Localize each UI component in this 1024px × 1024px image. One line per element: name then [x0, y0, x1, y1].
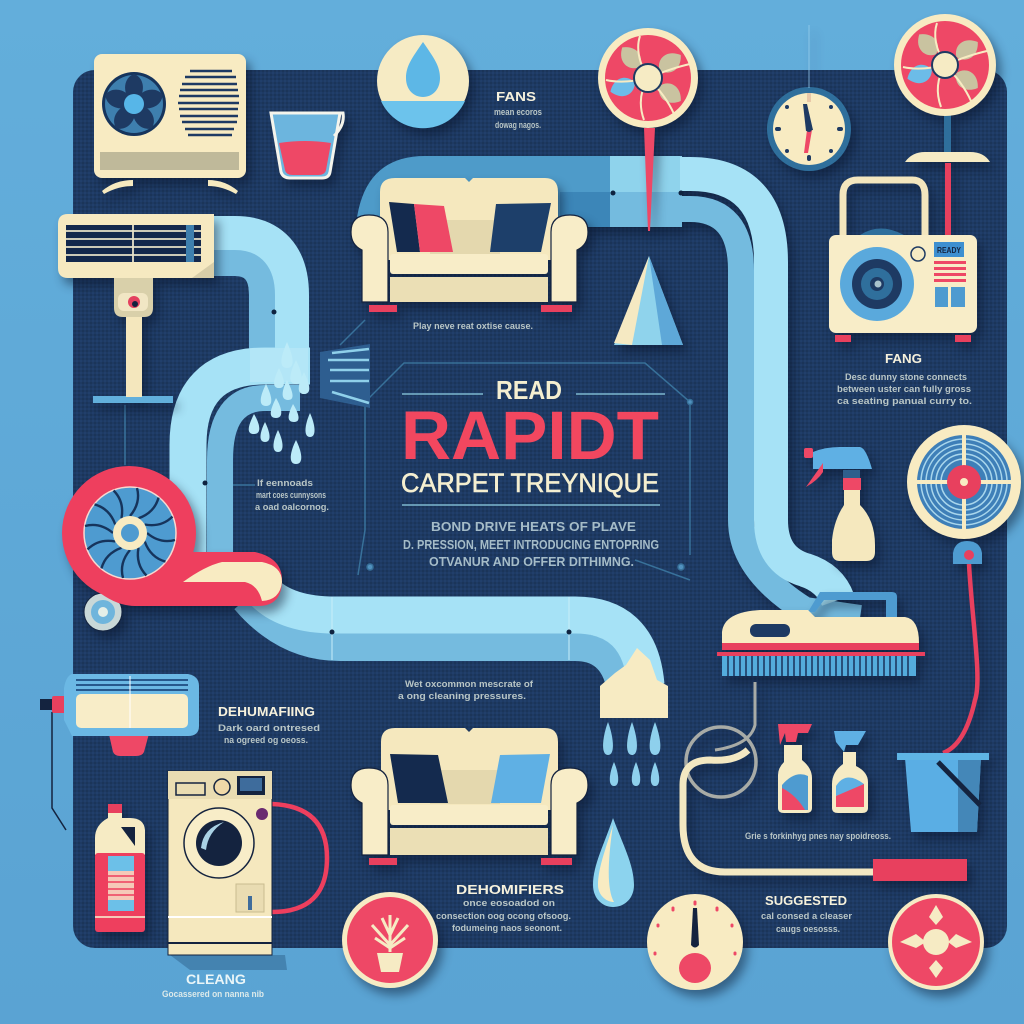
text: title description: BOND DRIVE HEATS OF PLAVE: [431, 519, 636, 534]
text: title description: D. PRESSION, MEET INTRODUCING ENTOPRING: [403, 537, 659, 552]
icon: pair of spray bottles: [778, 724, 868, 813]
icon: standing fan top right: [894, 14, 996, 235]
icon: portable carpet cleaner: READY: [937, 246, 962, 255]
text: pipe caption: mart coes cunnysons: [256, 490, 326, 500]
pipe: top route: [355, 156, 860, 618]
icon: cream nozzle: [600, 648, 668, 718]
text: fang label: Desc dunny stone connects: [845, 372, 967, 382]
text: bottom pipe caption: Wet oxcommon mescrate of: [405, 679, 534, 689]
text: sofa caption: Play neve reat oxtise cause.: [413, 321, 533, 331]
icon: cleaning jug: [95, 804, 145, 932]
icon: plant circle: [342, 892, 438, 988]
text: bottom pipe caption: a ong cleaning pressures.: [398, 691, 526, 701]
text: pipe caption: [255, 478, 329, 512]
text: fans label: mean ecoros: [494, 107, 542, 117]
icon: compass circle: [888, 894, 984, 990]
text: dehumidifiers label: [436, 882, 571, 933]
pipe: bottom route: [245, 590, 646, 685]
icon: bottom sofa: [351, 728, 588, 865]
icon: washing machine: [168, 771, 327, 970]
pipe: from wall unit: [214, 246, 279, 360]
text: suggested label: caugs oesosss.: [776, 924, 840, 934]
text: title description: OTVANUR AND OFFER DITHIMNG.: [429, 554, 634, 569]
icon: red blower: [62, 466, 282, 631]
icon: top sofa: [351, 178, 588, 312]
icon: ceiling fan top middle: [598, 28, 698, 231]
text: fang label: FANG: [885, 351, 922, 366]
pipe rivets: [202, 190, 684, 634]
text: cleaning label: [162, 971, 264, 999]
icon: large drop: [593, 818, 634, 907]
icon: scrub brush: [717, 592, 925, 676]
text: dehumidifiers label: once eosoadod on: [463, 898, 555, 908]
text: fang label: ca seating panual curry to.: [837, 396, 972, 406]
icon: droplet circle: [377, 35, 469, 128]
icon: wall AC unit on stand: [58, 214, 214, 403]
text: dehumidifying label: DEHUMAFIING: [218, 704, 315, 719]
text: bottles caption: Grie s forkinhyg pnes nay spoidreoss.: [745, 831, 891, 841]
text: suggested label: cal consed a cleaser: [761, 911, 853, 921]
text: fang label: between uster can fully gross: [837, 384, 971, 394]
title block: READ: [496, 375, 562, 405]
icon: measuring cup: [271, 113, 343, 178]
icon: hose coil and handle: [683, 682, 967, 881]
icon: round fan on stand: [907, 425, 1021, 753]
text: pipe caption: a oad oalcornog.: [255, 502, 329, 512]
icon: water drops and bristles: [249, 342, 370, 464]
text: title description: [403, 519, 659, 569]
icon: bucket: [897, 753, 989, 832]
circuit lines around title: [125, 320, 692, 580]
text: cleaning label: CLEANG: [186, 971, 246, 987]
icon: wall clock: [767, 25, 851, 171]
title block: RAPIDT: [401, 397, 659, 474]
title block: CARPET TREYNIQUE: [401, 468, 659, 498]
icon: drips: [603, 722, 660, 786]
text: pipe caption: If eennoads: [257, 478, 313, 488]
text: cleaning label: Gocassered on nanna nib: [162, 989, 264, 999]
text: dehumidifying label: Dark oard ontresed: [218, 723, 320, 733]
icon: portable carpet cleaner: [829, 180, 977, 342]
text: suggested label: SUGGESTED: [765, 893, 847, 908]
text: fang label: [837, 351, 972, 406]
icon: outdoor AC unit: [94, 54, 246, 194]
text: bottom pipe caption: [398, 679, 534, 701]
text: fans label: [494, 89, 542, 130]
text: dehumidifiers label: fodumeing naos seonont.: [452, 923, 562, 933]
title block: [401, 375, 665, 505]
icon: small AC dehumidifier: [40, 674, 199, 830]
text: suggested label: [761, 893, 853, 934]
icon: gauge: [647, 894, 743, 990]
text: dehumidifying label: na ogreed og oeoss.: [224, 735, 308, 745]
text: dehumidifiers label: consection oog ocong ofsoog.: [436, 911, 571, 921]
text: dehumidifiers label: DEHOMIFIERS: [456, 882, 564, 897]
icon: cone: [614, 256, 683, 345]
text: fans label: FANS: [496, 89, 536, 104]
text: fans label: dowag nagos.: [495, 120, 541, 130]
panel: navy background: [73, 70, 1007, 948]
text: dehumidifying label: [218, 704, 320, 745]
icon: spray bottle: [804, 447, 875, 561]
pipe: left arc: [188, 348, 310, 560]
